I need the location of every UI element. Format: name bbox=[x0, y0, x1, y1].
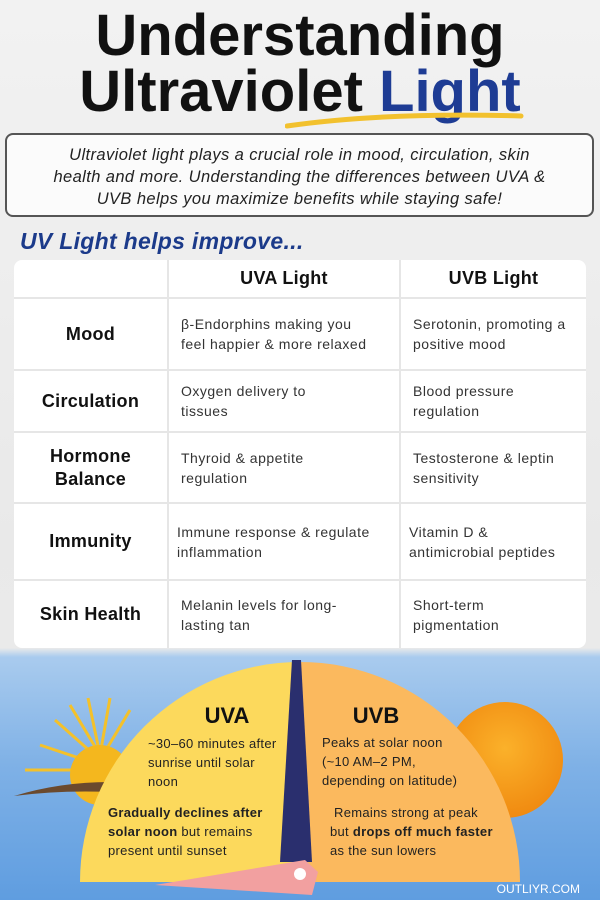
comparison table: positive mood bbox=[413, 336, 506, 352]
comparison table: feel happier & more relaxed bbox=[181, 336, 366, 352]
comparison table: lasting tan bbox=[181, 616, 250, 632]
UVB text: (~10 AM–2 PM, bbox=[322, 754, 416, 769]
intro text box: Ultraviolet light plays a crucial role in mood, circulation, skin bbox=[69, 146, 530, 164]
comparison table: Short-term bbox=[413, 596, 484, 612]
dial hand bbox=[155, 860, 318, 895]
UVB text: Peaks at solar noon bbox=[322, 735, 443, 750]
comparison table: Blood pressure bbox=[413, 383, 514, 399]
icon: setting sun right bbox=[447, 702, 563, 818]
UVA text: noon bbox=[148, 774, 178, 789]
comparison table: Balance bbox=[55, 468, 126, 488]
comparison table: antimicrobial peptides bbox=[409, 544, 555, 560]
comparison table: Hormone bbox=[50, 446, 131, 466]
comparison table: Oxygen delivery to bbox=[181, 383, 306, 399]
intro text box bbox=[5, 133, 594, 217]
dial needle bbox=[280, 660, 312, 862]
comparison table: Melanin levels for long- bbox=[181, 596, 337, 612]
UVA decline text: solar noon but remains bbox=[108, 824, 253, 839]
comparison table: pigmentation bbox=[413, 616, 499, 632]
comparison table: Serotonin, promoting a bbox=[413, 316, 566, 332]
comparison table: tissues bbox=[181, 403, 228, 419]
comparison table: Vitamin D & bbox=[409, 524, 488, 540]
title underline bbox=[285, 112, 524, 128]
icon: rising sun left bbox=[14, 698, 130, 805]
intro text box: UVB helps you maximize benefits while staying safe! bbox=[97, 190, 502, 208]
UVB decline text: as the sun lowers bbox=[330, 843, 436, 858]
panel: UVA half bbox=[80, 662, 300, 882]
comparison table: Skin Health bbox=[40, 604, 141, 624]
panel: UVB half bbox=[300, 662, 520, 882]
comparison table: Immune response & regulate bbox=[177, 524, 370, 540]
comparison table: inflammation bbox=[177, 544, 262, 560]
title: Understanding bbox=[95, 3, 505, 68]
intro text box: health and more. Understanding the differences between UVA & bbox=[53, 168, 546, 186]
UVB heading: UVB bbox=[353, 703, 399, 728]
subheading: UV Light helps improve... bbox=[20, 228, 304, 254]
comparison table: regulation bbox=[181, 470, 248, 486]
comparison table: Mood bbox=[66, 324, 115, 344]
title: Ultraviolet Light bbox=[79, 59, 521, 124]
UVA decline text: Gradually declines after bbox=[108, 805, 263, 820]
sun dial illustration bbox=[14, 660, 580, 896]
UVB decline text: Remains strong at peak bbox=[334, 805, 478, 820]
comparison table: sensitivity bbox=[413, 470, 479, 486]
comparison table: Testosterone & leptin bbox=[413, 450, 554, 466]
title bbox=[79, 3, 524, 128]
UVA text: ~30–60 minutes after bbox=[148, 736, 277, 751]
comparison table bbox=[14, 260, 586, 648]
comparison table: UVB Light bbox=[449, 268, 538, 288]
comparison table: Immunity bbox=[49, 531, 132, 551]
UVB decline text: but drops off much faster bbox=[330, 824, 493, 839]
UVB text: depending on latitude) bbox=[322, 773, 457, 788]
comparison table: β-Endorphins making you bbox=[181, 316, 352, 332]
comparison table: UVA Light bbox=[240, 268, 328, 288]
comparison table: regulation bbox=[413, 403, 480, 419]
comparison table: Circulation bbox=[42, 390, 139, 410]
comparison table: Thyroid & appetite bbox=[181, 450, 304, 466]
UVA text: sunrise until solar bbox=[148, 755, 255, 770]
credit: OUTLIYR.COM bbox=[497, 882, 580, 896]
UVA heading: UVA bbox=[205, 703, 250, 728]
UVA decline text: present until sunset bbox=[108, 843, 227, 858]
